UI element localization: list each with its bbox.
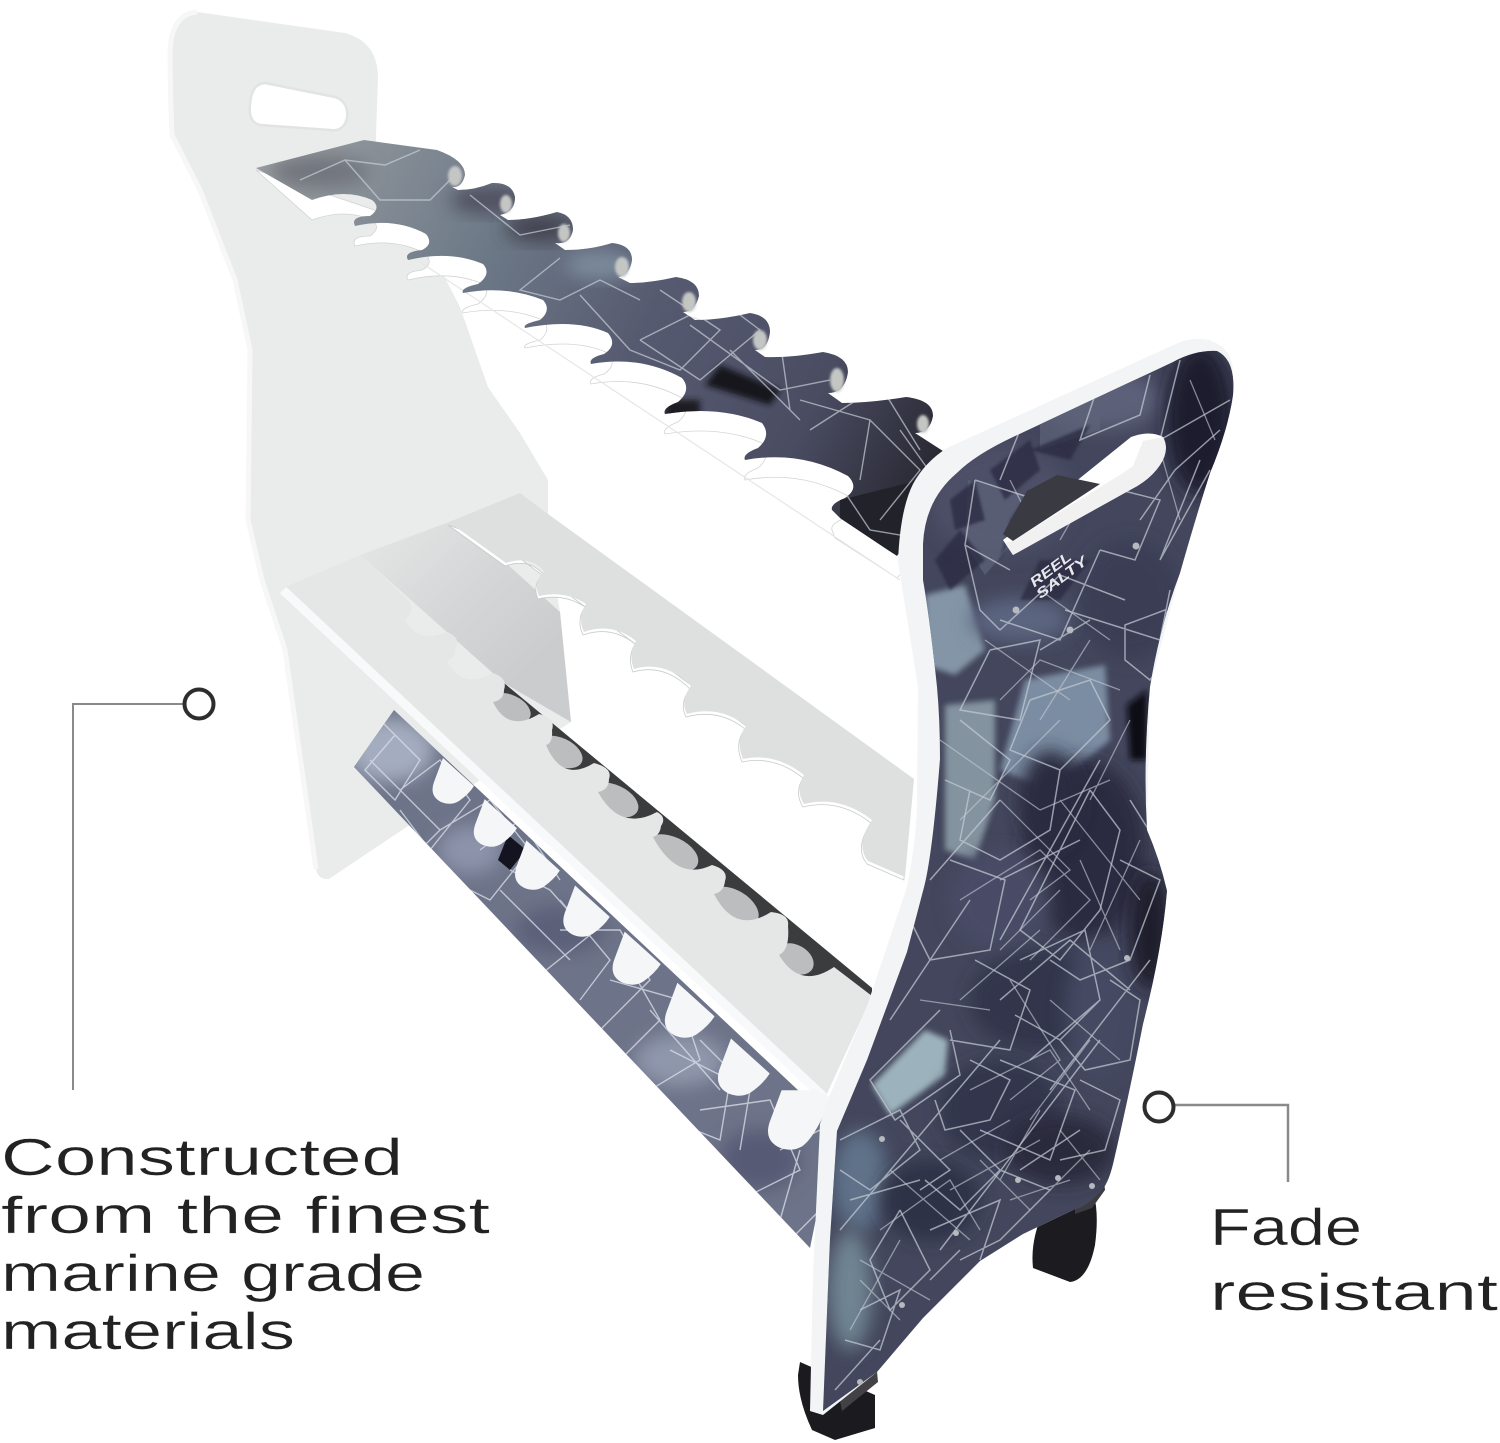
front lower shelf [283, 555, 872, 1150]
white hanging lobes [433, 758, 831, 1150]
front wheel [798, 1361, 878, 1440]
shelf rear tooth highlights [448, 166, 929, 433]
rear wheel [1032, 1171, 1105, 1282]
side panel white edge [810, 339, 1233, 1415]
back panel handle slot [250, 83, 347, 130]
callout text left: marine grade [1, 1245, 425, 1303]
callout text right: resistant [1210, 1264, 1499, 1322]
callout: marine grade materials [1, 690, 491, 1361]
callout text right: Fade [1210, 1199, 1362, 1257]
top rod shelf [240, 130, 970, 580]
callout: fade resistant [1144, 1092, 1499, 1322]
callout leader line left [73, 704, 185, 1090]
side panel logo: REEL [1026, 548, 1074, 590]
front wheel bracket [838, 1361, 878, 1411]
rear wheel bracket [1075, 1171, 1105, 1214]
callout text left: Constructed [1, 1129, 403, 1187]
callout marker left [184, 690, 214, 718]
shelf patterned top surface [256, 140, 943, 556]
callout text left [1, 1129, 491, 1361]
dark mottling [935, 425, 1090, 600]
side panel [800, 330, 1250, 1430]
callout leader line right [1173, 1105, 1288, 1182]
callout marker right [1144, 1092, 1174, 1122]
side panel handle slot [1003, 434, 1166, 555]
side panel printed face [823, 350, 1234, 1411]
shaded gap behind front shelf [360, 522, 571, 722]
shelf white front thickness [256, 170, 950, 578]
side panel screws [857, 542, 1140, 1385]
back panel [170, 12, 571, 879]
callout text left: materials [1, 1303, 295, 1361]
rear lower shelf [448, 493, 914, 880]
callout text left: from the finest [1, 1187, 491, 1245]
lower patterned plate [346, 710, 840, 1248]
side panel logo [1025, 541, 1092, 602]
side panel logo: SALTY [1033, 551, 1092, 602]
callout text right [1210, 1199, 1499, 1322]
dark strip seen through the front shelf notches [485, 683, 872, 1005]
